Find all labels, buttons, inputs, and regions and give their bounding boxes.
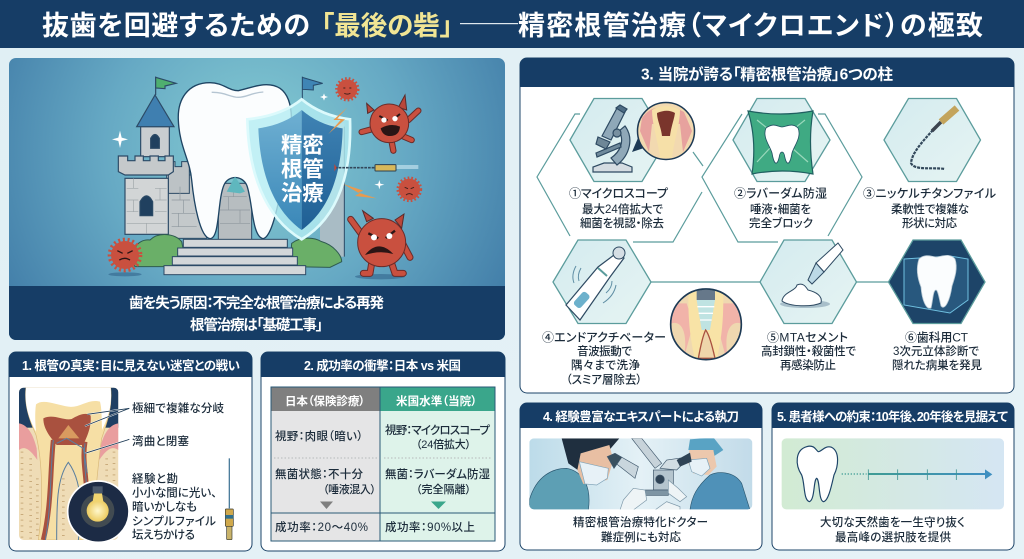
- tooth cross-section with light bulb: [19, 388, 233, 542]
- column: US standard: （完全隔離）: [416, 482, 471, 496]
- pillar 1: microscope: ①マイクロスコープ: [569, 186, 668, 200]
- pillar 4: endo activator: [542, 240, 666, 386]
- callout: experience note: 暗いかしなも: [132, 500, 197, 514]
- illustration: tooth castle with shield: 精密: [281, 134, 324, 158]
- bushes: [133, 235, 342, 267]
- pillar 5: MTA cement: 高封鎖性・殺菌性で: [761, 344, 856, 358]
- pillar 6: dental CT: [888, 240, 985, 372]
- panel 5 heading: 5. 患者様への約束：10年後、20年後を見据えて: [777, 409, 1009, 424]
- illustration: tooth castle with shield: 治療: [281, 182, 324, 206]
- hero caption band: 歯を失う原因：不完全な根管治療による再発: [129, 294, 384, 312]
- panel 2 heading: [261, 352, 505, 377]
- panel: hero illustration: [9, 58, 505, 340]
- connecting hexagon outlines: [537, 114, 889, 282]
- title banner: [0, 0, 1024, 48]
- germ: bottom left: [108, 240, 142, 276]
- icon: tooth in 3D cube: [904, 255, 968, 313]
- pillar 4: endo activator: 音波振動で: [577, 344, 632, 358]
- panel 4 text: 精密根管治療特化ドクター: [573, 515, 708, 529]
- panel 1 heading: [9, 352, 252, 377]
- title banner: 「最後の砦」: [321, 11, 453, 41]
- pillar 2: rubber dam: 唾液・細菌を: [750, 202, 811, 216]
- panel 5: long-term promise: [772, 403, 1014, 550]
- panel 4 text: [573, 515, 708, 544]
- column: Japan: 視野：肉眼（暗い）: [275, 429, 363, 443]
- column: Japan: 成功率：20〜40%: [275, 520, 368, 534]
- microscope: [607, 438, 690, 495]
- left doctor: [529, 468, 589, 510]
- callout: experience note: シンプルファイル: [132, 515, 217, 528]
- shield glow: [247, 99, 350, 239]
- pillar 5: MTA cement: 再感染防止: [780, 358, 836, 372]
- callout: experience note: 坛えちかける: [132, 528, 195, 542]
- magnified tooth circle: [632, 102, 694, 160]
- icon: tooth: [797, 446, 838, 502]
- column: Japan: 無菌状態：不十分: [275, 467, 364, 481]
- pillar 6: dental CT: 3次元立体診断で: [893, 344, 979, 358]
- germ: mid right small: [398, 178, 421, 201]
- icon: endodontic file: [225, 458, 233, 540]
- panel 3: six pillars: [520, 58, 1014, 393]
- icon: microscope: [593, 105, 632, 172]
- right doctor: [690, 473, 750, 510]
- icon: rubber dam with tooth: [748, 111, 813, 174]
- column: US standard: （24倍拡大）: [416, 437, 471, 451]
- flag right: [302, 77, 323, 102]
- pillar 3: NiTi file: 柔軟性で複雑な: [891, 202, 969, 216]
- column: Japan: 日本（保険診療）: [285, 394, 365, 408]
- callout: experience note: 小小な間に光い、: [132, 486, 217, 500]
- illustration: tooth castle with shield: [108, 77, 421, 279]
- leader lines: [85, 408, 129, 453]
- panel 4 heading: [520, 403, 762, 428]
- callout: curved: 湾曲と閉塞: [132, 434, 190, 448]
- panel 1: root canal truth: [9, 352, 252, 551]
- panel 4 text: 難症例にも対応: [601, 530, 682, 544]
- pillar 2: rubber dam: ②ラバーダム防湿: [734, 186, 827, 200]
- illustration: tooth castle with shield: 根管: [281, 158, 324, 182]
- panel 3 heading: [520, 58, 1014, 87]
- germ: bottom large: [351, 211, 410, 279]
- panel 5 text: [820, 515, 965, 544]
- germ: top small: [337, 79, 358, 100]
- column: US standard: 成功率：90%以上: [385, 520, 475, 534]
- pillar 1: microscope: 細菌を視認・除去: [580, 216, 664, 230]
- pillar 1: microscope: [569, 98, 694, 230]
- pillar 2: rubber dam: [733, 98, 830, 230]
- pillar 3: NiTi file: ③ニッケルチタンファイル: [863, 186, 996, 200]
- title banner: 抜歯を回避するための: [42, 11, 310, 41]
- magnified root canal circle: [670, 288, 743, 362]
- pillar 2: rubber dam: 完全ブロック: [749, 216, 813, 230]
- column: US standard: 無菌：ラバーダム防湿: [385, 467, 490, 481]
- callout: experience note: [132, 472, 217, 542]
- tooth: [178, 83, 291, 239]
- panel 4: expert surgery: [520, 403, 762, 550]
- panel 4 heading: 4. 経験豊富なエキスパートによる執刀: [543, 409, 739, 424]
- icon: syringe and cement: [780, 243, 843, 308]
- shield: [258, 110, 302, 230]
- column: US standard: 米国水準（当院）: [396, 394, 477, 408]
- column: Japan: [271, 387, 380, 541]
- castle tower: [118, 77, 176, 234]
- column: Japan: （唾液混入）: [323, 482, 376, 496]
- illustration: doctors at microscope: [529, 437, 752, 510]
- pillar 4: endo activator: 隅々まで洗浄: [571, 358, 640, 372]
- panel 2: success rate comparison: [261, 352, 505, 551]
- icon: nickel titanium file: [911, 108, 957, 169]
- pillar 3: NiTi file: [863, 98, 996, 230]
- pillar 6: dental CT: 隠れた病巣を発見: [892, 358, 982, 372]
- sparkles: [112, 93, 384, 189]
- pillar 5: MTA cement: ⑤MTAセメント: [767, 330, 848, 344]
- pillar 1: microscope: 最大24倍拡大で: [582, 202, 663, 216]
- panel 5 heading: [772, 403, 1014, 428]
- panel 2 heading: 2. 成功率の衝撃：日本 vs 米国: [304, 358, 461, 373]
- hero caption band: [9, 286, 505, 340]
- light bulb callout: [68, 481, 129, 542]
- pillar 3: NiTi file: 形状に対応: [902, 216, 958, 230]
- steps: [164, 239, 306, 275]
- panel 5 text: 大切な天然歯を一生守り抜く: [820, 515, 965, 529]
- panel 5 text: 最高峰の選択肢を提供: [835, 530, 952, 544]
- callout: experience note: 経験と勘: [132, 472, 178, 486]
- pillar 5: MTA cement: [760, 240, 856, 372]
- column: US standard: 視野：マイクロスコープ: [385, 423, 491, 437]
- title banner: 精密根管治療（マイクロエンド）の極致: [518, 11, 983, 41]
- pillar 6: dental CT: ⑥歯科用CT: [905, 330, 969, 344]
- hero caption band: 根管治療は「基礎工事」: [190, 316, 323, 334]
- endodontic file: [334, 164, 418, 171]
- panel 1 heading: 1. 根管の真実：目に見えない迷宮との戦い: [22, 358, 240, 373]
- germ: top large: [362, 95, 418, 151]
- pillar 4: endo activator: （スミア層除去）: [566, 372, 642, 386]
- comparison table: [271, 387, 495, 541]
- column: US standard: [380, 387, 495, 541]
- arrow timeline: [842, 469, 992, 480]
- castle wall: [167, 123, 344, 257]
- icon: activator handpiece: [566, 247, 625, 320]
- gloved hands: [620, 488, 647, 510]
- pillar 4: endo activator: ④エンドアクチベーター: [542, 330, 666, 344]
- timeline illustration: [782, 438, 1004, 509]
- lightning bolts: [328, 107, 377, 198]
- callout: branching: 極細で複雑な分岐: [132, 401, 224, 415]
- panel 3 heading: 3. 当院が誇る「精密根管治療」6つの柱: [641, 64, 893, 84]
